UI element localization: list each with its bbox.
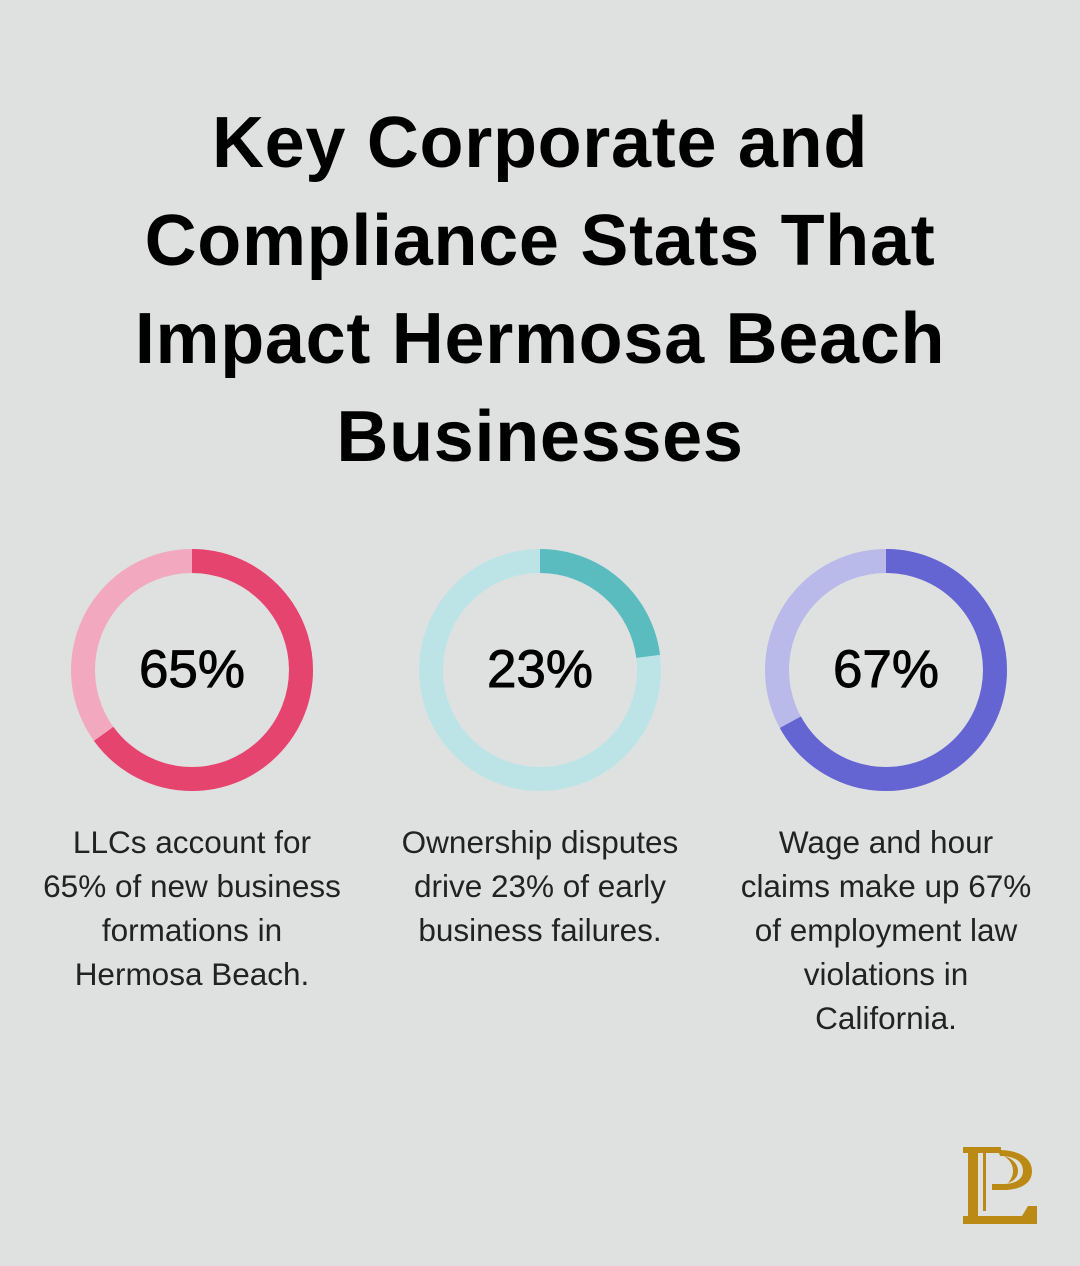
caption: wage and hour: California. <box>815 1000 957 1036</box>
caption: wage and hour: of employment law <box>755 912 1017 948</box>
caption: wage and hour <box>741 824 1031 1036</box>
donut: 67%: 67% <box>833 640 939 699</box>
caption: LLCs <box>43 824 341 992</box>
caption: wage and hour: violations in <box>804 956 968 992</box>
donut: 65% <box>71 549 313 791</box>
donut: 65%: 65% <box>139 640 245 699</box>
caption: ownership disputes <box>402 824 678 948</box>
caption: ownership disputes: Ownership disputes <box>402 824 678 860</box>
caption: wage and hour: claims make up 67% <box>741 868 1031 904</box>
title: Impact Hermosa Beach <box>135 299 945 379</box>
caption: LLCs: 65% of new business <box>43 868 341 904</box>
caption: LLCs: LLCs account for <box>73 824 311 860</box>
donut: 23% <box>419 549 661 791</box>
donut: 23%: 23% <box>487 640 593 699</box>
title: Businesses <box>336 397 744 477</box>
title <box>135 103 945 477</box>
title: Compliance Stats That <box>145 201 935 281</box>
caption: LLCs: formations in <box>102 912 282 948</box>
caption: ownership disputes: drive 23% of early <box>414 868 666 904</box>
caption: LLCs: Hermosa Beach. <box>75 956 309 992</box>
caption: ownership disputes: business failures. <box>418 912 662 948</box>
caption: wage and hour: Wage and hour <box>779 824 993 860</box>
donut: 67% <box>765 549 1007 791</box>
title: Key Corporate and <box>212 103 868 183</box>
logo <box>963 1147 1037 1224</box>
